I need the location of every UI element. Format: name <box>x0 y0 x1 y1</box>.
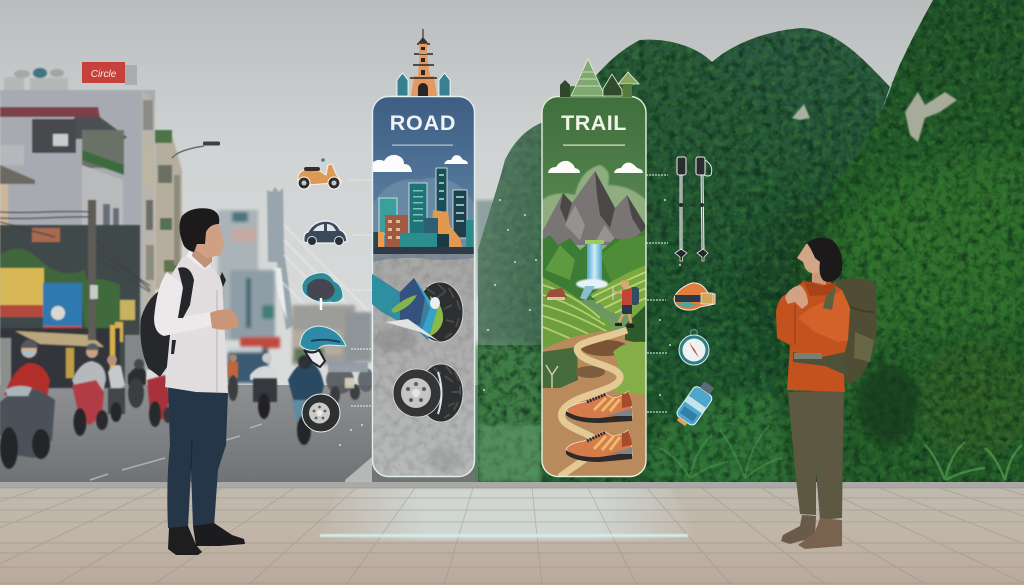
middle karst peak <box>478 40 830 482</box>
winding path <box>560 330 627 477</box>
panel border <box>372 96 474 476</box>
rider in white <box>107 355 125 422</box>
pants <box>788 390 844 520</box>
dark bush right <box>625 306 646 342</box>
trail ground <box>542 330 646 477</box>
hood <box>803 280 838 296</box>
lower fern band <box>650 393 790 482</box>
distant bridge tower <box>267 187 372 345</box>
far rider in black <box>128 359 146 408</box>
red parked scooter <box>147 375 173 427</box>
big peak <box>571 59 605 96</box>
hands <box>210 309 238 330</box>
tiered body <box>411 53 437 96</box>
shop sign: red band <box>0 305 44 317</box>
blue rider <box>288 355 324 445</box>
hair <box>807 238 842 282</box>
panel: road <box>372 96 475 477</box>
double tyre <box>393 364 463 422</box>
street centre markings <box>90 424 262 480</box>
back peak rock <box>792 104 810 120</box>
jacket <box>776 282 850 392</box>
neck <box>192 246 212 268</box>
left teal tower <box>397 73 408 96</box>
concrete grit <box>372 254 475 477</box>
icon: car <box>304 221 347 246</box>
shirt sleeve <box>154 272 212 336</box>
shop sign: yellow <box>0 268 44 308</box>
icon: trail mountain crown <box>560 59 639 97</box>
shirt collar <box>186 250 213 270</box>
hiking boot lower <box>566 430 632 462</box>
right terraces <box>590 265 646 320</box>
neck <box>812 268 826 285</box>
pants <box>167 386 228 528</box>
road connector lines <box>349 180 372 406</box>
road panel sky <box>372 96 475 256</box>
hair <box>179 208 219 252</box>
skyline haze <box>373 178 474 230</box>
panel: trail <box>542 96 646 477</box>
floor light line <box>320 534 688 537</box>
foliage texture <box>476 0 1024 482</box>
valley dark band <box>740 180 850 400</box>
icon: compass <box>679 330 709 365</box>
fern fronds left <box>660 425 782 478</box>
hiking boot upper <box>566 391 632 423</box>
small farm hut <box>545 288 567 300</box>
left boot <box>781 515 816 544</box>
face <box>196 220 225 258</box>
far hazy limestone ridge <box>476 200 495 300</box>
icon: water bottle <box>673 378 718 430</box>
icon: trekking poles <box>675 157 712 261</box>
shoes <box>168 526 202 555</box>
hiker <box>613 280 639 328</box>
icon: scooter <box>298 158 342 189</box>
person: man with backpack <box>140 208 245 555</box>
rooftop sign <box>82 62 137 85</box>
pack strap <box>823 286 836 310</box>
concrete edge <box>372 254 475 262</box>
backpack strap <box>178 267 194 318</box>
utility pole and wires <box>0 200 150 340</box>
right teal tower <box>439 73 450 96</box>
waterfall <box>587 244 602 282</box>
street light <box>172 142 220 158</box>
heading: road: ROAD <box>390 111 456 135</box>
left terraces <box>542 277 612 350</box>
forest below mountain <box>542 228 646 300</box>
jacket near sleeve <box>798 290 850 342</box>
rider in red <box>0 340 55 469</box>
person: woman hiker <box>776 238 877 549</box>
building: narrow side block <box>155 130 182 290</box>
awning <box>15 331 104 347</box>
rider behind man <box>228 354 238 401</box>
rider in grey with red bike <box>72 344 108 436</box>
pavement kerb strip <box>0 482 1024 488</box>
hip belt <box>793 352 846 375</box>
floating dust particles <box>339 199 681 446</box>
distant city blocks <box>218 210 372 383</box>
backpack <box>140 287 178 377</box>
right boot <box>798 518 842 549</box>
icon: headlamp <box>674 283 715 310</box>
mountain <box>542 171 646 245</box>
building: lower storefront area <box>0 225 145 388</box>
heading rule <box>392 144 453 146</box>
trail connector lines <box>646 175 668 412</box>
fern fronds right <box>925 442 1022 480</box>
left hut <box>560 80 570 97</box>
cliff rock <box>905 92 957 142</box>
crowd far <box>326 362 374 404</box>
rooftop sign: Circle <box>91 69 117 80</box>
city skyline <box>372 168 475 254</box>
base foliage <box>562 84 632 97</box>
bright slope lumps <box>840 150 1024 340</box>
small dark peak <box>603 74 622 96</box>
traffic: motorbikes and riders <box>0 340 374 469</box>
lower left haze <box>478 425 541 482</box>
jungle mountains <box>476 0 1024 482</box>
storefront shadows <box>0 328 120 388</box>
icon: helmet <box>300 326 346 367</box>
splash <box>576 279 608 289</box>
face <box>797 243 823 273</box>
green bush right <box>612 342 646 395</box>
lower left foliage <box>476 341 541 482</box>
clouds <box>372 155 468 172</box>
heading rule <box>563 144 625 146</box>
panel border <box>542 96 646 476</box>
road surface <box>0 385 480 485</box>
cliff wall <box>780 0 1024 482</box>
floor <box>0 482 1024 585</box>
white shirt rider <box>250 353 279 419</box>
large round tree <box>919 342 1024 458</box>
stains <box>373 328 417 352</box>
icon: pagoda tower <box>397 29 450 96</box>
left shoulder haze <box>478 100 590 345</box>
shirt torso <box>165 256 228 393</box>
hands <box>785 285 808 309</box>
clouds <box>548 161 643 173</box>
backpack <box>838 278 877 384</box>
sign disc <box>51 306 65 320</box>
shop sign: blue <box>43 283 82 327</box>
dark left foliage <box>542 347 578 388</box>
back karst peak <box>712 28 890 240</box>
floor reflection under panels <box>320 488 700 540</box>
pagoda peak <box>618 72 639 84</box>
street background: city side <box>0 62 480 485</box>
tyre with mountain shard <box>372 274 463 342</box>
sidewalk wedge <box>345 457 372 482</box>
heading: trail: TRAIL <box>561 111 627 135</box>
building: main grey block <box>0 68 155 370</box>
soft backdrop hills <box>542 165 646 250</box>
icon: storm tree cloud <box>302 273 343 310</box>
brown patch <box>581 340 629 356</box>
icon: small wheel <box>302 394 340 432</box>
dark hollow <box>858 365 918 445</box>
bare tree <box>546 365 558 388</box>
